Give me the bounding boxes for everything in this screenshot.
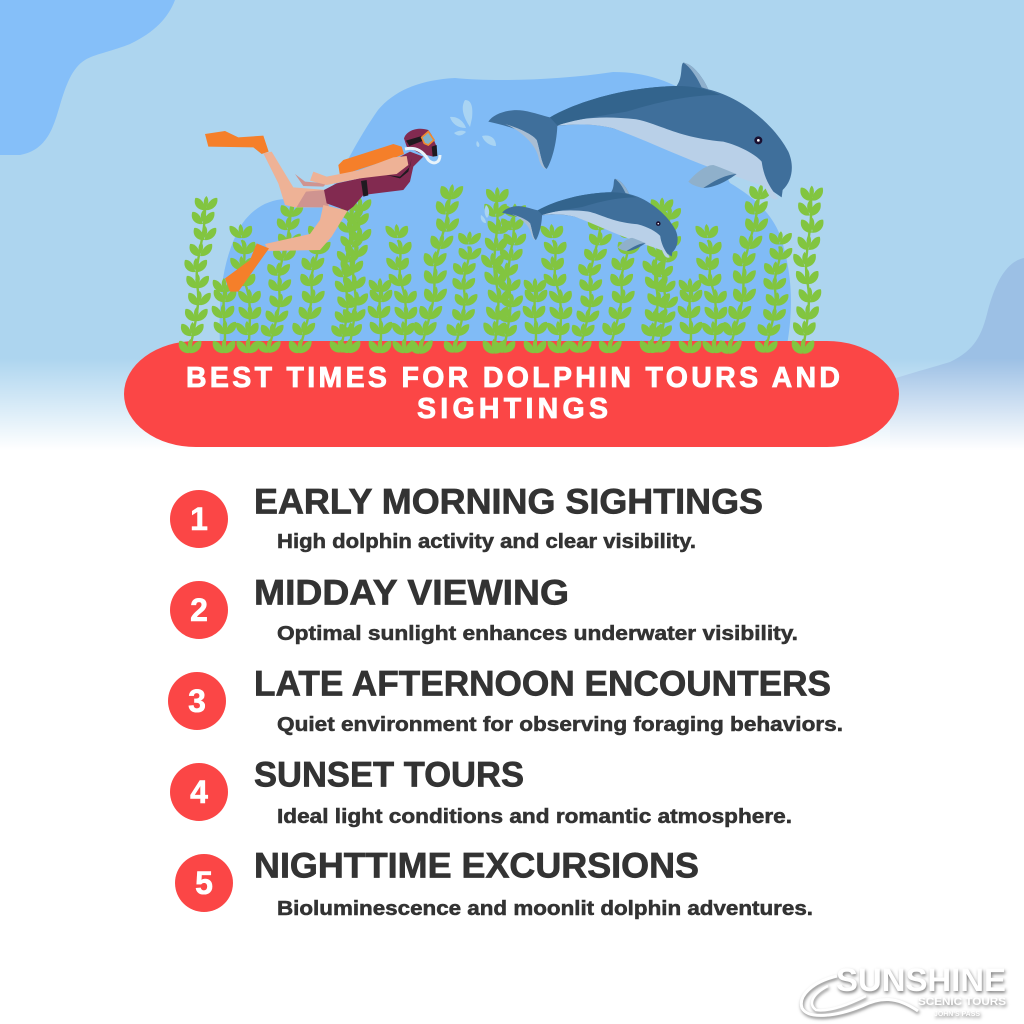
item 4: SUNSET TOURS [254,756,524,794]
title [186,362,840,425]
snorkel [405,148,440,163]
item 5: 5 [195,865,213,901]
logo: SUNSHINE [836,962,1006,998]
arm [310,156,408,185]
rear hand [295,174,327,187]
head [404,129,437,157]
front fin [225,243,269,292]
item 1: High dolphin activity and clear visibility. [277,530,696,553]
illustration: large dolphin [488,63,792,199]
item 2: MIDDAY VIEWING [254,574,569,612]
blob: centre water [220,72,791,345]
item 3 [168,664,843,736]
item 1: EARLY MORNING SIGHTINGS [254,482,763,522]
blob: top left [0,0,175,155]
logo [801,962,1006,1018]
item 4: 4 [190,774,208,810]
item 1: 1 [190,501,208,537]
item 5: Bioluminescence and moonlit dolphin adventures. [277,897,813,920]
item 5: NIGHTTIME EXCURSIONS [254,846,699,886]
item 2: Optimal sunlight enhances underwater visibility. [277,622,798,645]
wetsuit [324,152,423,211]
item 4: Ideal light conditions and romantic atmosphere. [277,805,792,828]
title: SIGHTINGS [417,393,608,425]
logo: SCENIC TOURS [918,996,1006,1008]
front leg [265,205,348,251]
item 1 [170,482,763,553]
white fade [0,358,1024,450]
illustration: diver [205,129,440,292]
logo: JOHN'S PASS [934,1011,980,1018]
item 2 [170,574,798,645]
item 3: 3 [188,683,206,719]
item 5 [175,846,813,920]
tank [338,144,404,176]
back leg [263,152,329,207]
item 2: 2 [190,592,208,628]
item 3: Quiet environment for observing foraging behaviors. [277,713,843,736]
item 4 [170,756,792,828]
blob: right [890,258,1024,460]
title pill background [124,341,899,447]
back fin [205,131,269,154]
title: BEST TIMES FOR DOLPHIN TOURS AND [186,362,840,394]
illustration: small dolphin [502,179,678,258]
icon: water splash [450,100,496,223]
seaweed [178,184,824,354]
item 3: LATE AFTERNOON ENCOUNTERS [254,664,831,704]
